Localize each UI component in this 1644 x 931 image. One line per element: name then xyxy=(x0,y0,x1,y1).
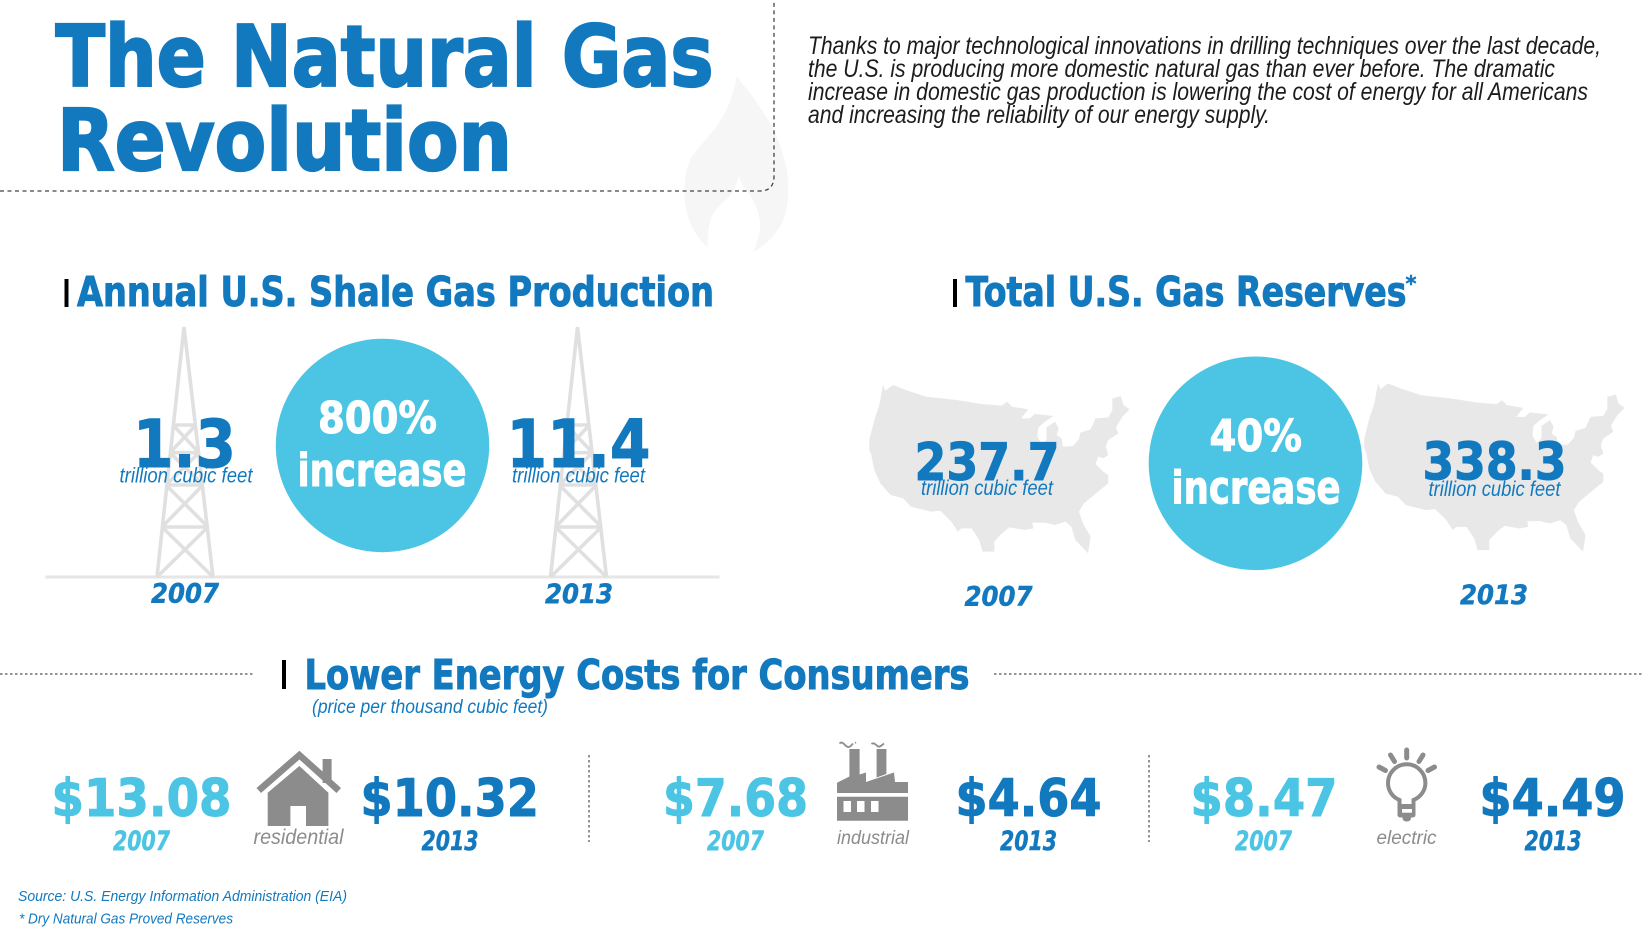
panel: total gas reserves xyxy=(869,268,1625,612)
label: electric: electric xyxy=(1376,828,1437,849)
price: $13.08 2007: 2007 xyxy=(113,826,170,857)
price: $4.49 2013 xyxy=(1480,769,1626,857)
stat: 1.3 trillion cubic feet 2007: trillion cubic feet xyxy=(120,465,254,488)
heading: total gas reserves: * xyxy=(1406,272,1416,296)
price: $7.68 2007: 2007 xyxy=(707,826,764,857)
stat: 11.4 trillion cubic feet 2013: trillion cubic feet xyxy=(512,465,646,488)
stat: 1.3 trillion cubic feet 2007: 1.3 xyxy=(133,406,236,483)
stat: 338.3 trillion cubic feet 2013: trillion cubic feet xyxy=(1428,478,1562,501)
title xyxy=(56,8,714,191)
circle: 40% increase xyxy=(1149,356,1362,570)
stat: 11.4 trillion cubic feet 2013: 2013 xyxy=(545,579,613,610)
stat: 1.3 trillion cubic feet 2007 xyxy=(120,406,254,610)
dotted rule right xyxy=(994,673,1644,675)
circle: 800% increase xyxy=(276,339,489,552)
price: $4.49 2013: $4.49 xyxy=(1480,769,1626,829)
heading: lower energy costs: Lower Energy Costs for Consumers xyxy=(304,651,970,699)
price: $4.64 2013: $4.64 xyxy=(956,769,1102,829)
price: $4.64 2013 xyxy=(956,769,1102,857)
circle: 40% increase: increase xyxy=(1172,462,1340,514)
stat: 338.3 trillion cubic feet 2013: 2013 xyxy=(1460,580,1528,611)
label: industrial: industrial xyxy=(837,828,910,849)
price: $13.08 2007: $13.08 xyxy=(52,769,232,829)
heading: total gas reserves: Total U.S. Gas Reserves xyxy=(966,268,1406,316)
circle: 800% increase: increase xyxy=(298,444,466,497)
price: $13.08 2007 xyxy=(52,769,232,857)
stat: 338.3 trillion cubic feet 2013: 338.3 xyxy=(1422,432,1566,492)
dotted divider xyxy=(1148,755,1150,842)
price: $4.49 2013: 2013 xyxy=(1524,826,1582,857)
stat: 237.7 trillion cubic feet 2007: 2007 xyxy=(964,582,1033,612)
icon: factory xyxy=(837,742,908,821)
circle: 800% increase: 800% xyxy=(318,393,437,444)
price: $7.68 2007 xyxy=(663,769,808,857)
stat: 338.3 trillion cubic feet 2013 xyxy=(1422,432,1566,611)
ground line xyxy=(46,576,720,578)
price: $8.47 2007 xyxy=(1190,769,1338,857)
map: united states 2007 xyxy=(869,385,1130,553)
icon: gas derrick 2013 xyxy=(550,327,606,577)
icon: light bulb xyxy=(1379,750,1434,822)
circle: 40% increase: 40% xyxy=(1210,411,1302,462)
group: industrial prices xyxy=(663,742,1102,857)
panel: annual shale gas production xyxy=(46,268,720,610)
stat: 11.4 trillion cubic feet 2013: 11.4 xyxy=(506,406,650,483)
label: residential: residential xyxy=(254,826,345,849)
heading: shale gas production: Annual U.S. Shale Gas Production xyxy=(77,268,714,316)
map: united states 2013 xyxy=(1364,383,1625,552)
stat: 11.4 trillion cubic feet 2013 xyxy=(506,406,650,610)
source notes xyxy=(18,888,347,928)
stat: 237.7 trillion cubic feet 2007: trillion cubic feet xyxy=(921,477,1054,500)
dotted rule left xyxy=(0,673,255,675)
icon: gas derrick 2007 xyxy=(157,327,213,577)
source notes: * Dry Natural Gas Proved Reserves xyxy=(19,910,233,928)
stat: 1.3 trillion cubic feet 2007: 2007 xyxy=(151,578,219,610)
title: Revolution xyxy=(57,92,512,191)
icon: background flame xyxy=(684,76,788,252)
price: $10.32 2013 xyxy=(360,769,539,857)
price: $8.47 2007: $8.47 xyxy=(1190,769,1338,829)
dotted divider xyxy=(588,755,590,842)
group: residential prices xyxy=(52,751,539,857)
intro paragraph: and increasing the reliability of our energy supply. xyxy=(808,101,1270,129)
price: $7.68 2007: $7.68 xyxy=(663,769,808,829)
icon: house xyxy=(256,751,341,826)
source notes: Source: U.S. Energy Information Administration (EIA) xyxy=(18,888,347,905)
price: $8.47 2007: 2007 xyxy=(1235,826,1292,857)
price: $10.32 2013: 2013 xyxy=(422,826,478,857)
price: $10.32 2013: $10.32 xyxy=(360,769,539,829)
title: The Natural Gas xyxy=(56,8,714,107)
group: electric prices xyxy=(1190,750,1626,857)
price: $4.64 2013: 2013 xyxy=(1000,826,1057,857)
intro paragraph xyxy=(808,32,1601,129)
panel: lower energy costs xyxy=(0,651,1644,857)
stat: 237.7 trillion cubic feet 2007 xyxy=(914,433,1060,612)
stat: 237.7 trillion cubic feet 2007: 237.7 xyxy=(914,433,1060,493)
subheading: price per thousand cubic feet: (price per thousand cubic feet) xyxy=(312,697,548,718)
title frame dashed line xyxy=(0,0,774,191)
